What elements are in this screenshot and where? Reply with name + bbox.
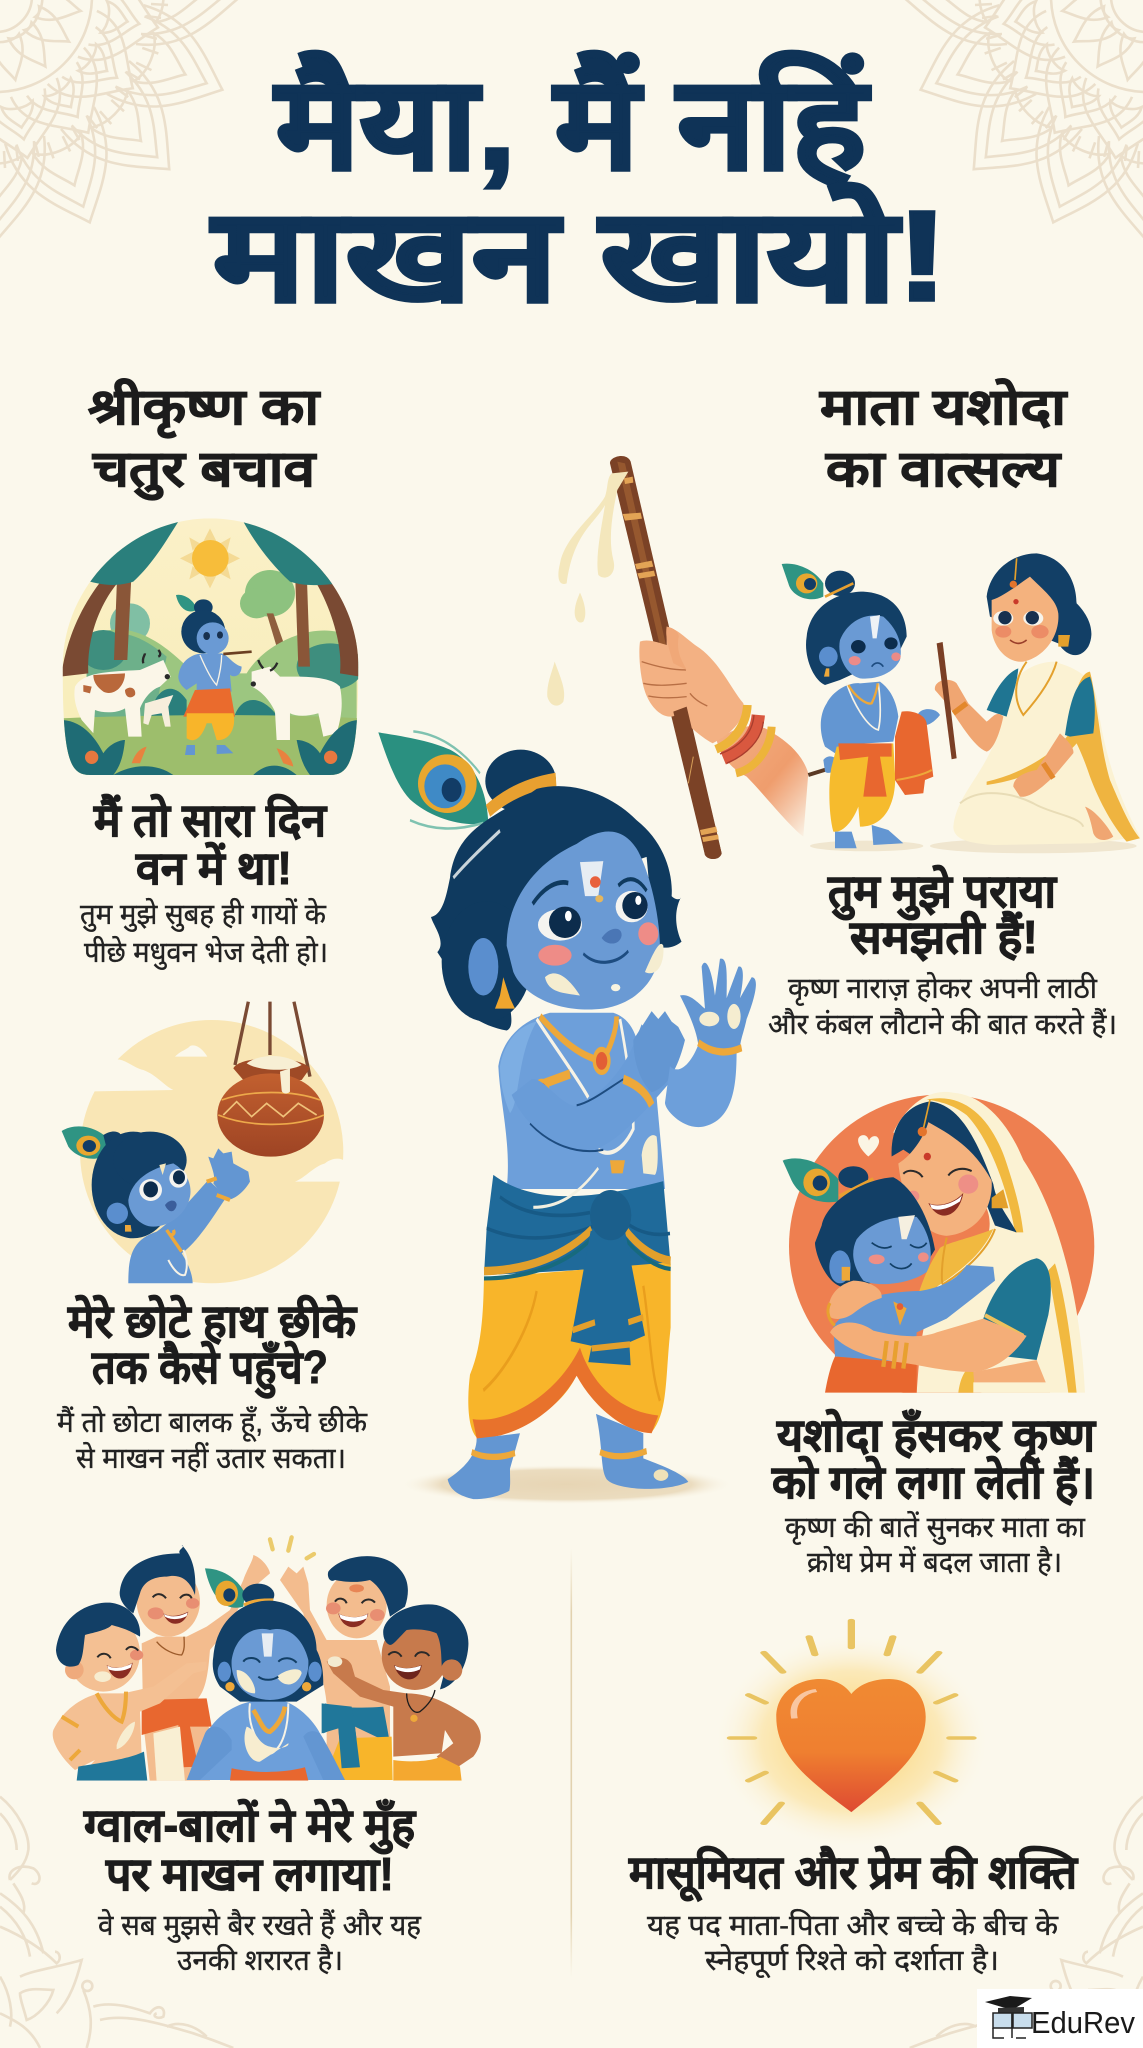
butter on belly bbox=[642, 1135, 658, 1175]
anklets bbox=[472, 1451, 647, 1457]
face bbox=[898, 1122, 992, 1236]
body text: यह पद माता-पिता और बच्चे के बीच के bbox=[647, 1909, 1059, 1942]
back left boy bbox=[120, 1545, 270, 1783]
panel: power of innocence and love bbox=[628, 1621, 1079, 1978]
body text: कृष्ण नाराज़ होकर अपनी लाठी bbox=[788, 972, 1097, 1006]
illustration: mother hugging child bbox=[783, 1092, 1094, 1398]
middle hand bbox=[633, 1011, 685, 1092]
yashoda hair bbox=[987, 553, 1091, 655]
heading: left column: श्रीकृष्ण का bbox=[88, 378, 321, 439]
knot bbox=[590, 1190, 631, 1240]
corner ornament bottom left bbox=[0, 1797, 233, 2048]
heading: ग्वाल-बालों ने मेरे मुँह bbox=[83, 1799, 417, 1855]
sparkle marks bbox=[270, 1537, 314, 1558]
forearm bbox=[918, 709, 940, 725]
legs and feet bbox=[448, 1414, 688, 1499]
icon: radiant heart bbox=[713, 1621, 990, 1850]
boy hands bbox=[208, 1148, 250, 1200]
corner ornament bottom right bbox=[910, 1797, 1143, 2048]
saree veil bbox=[893, 1092, 1085, 1393]
heading: तक कैसे पहुँचे? bbox=[91, 1341, 328, 1399]
logo: EduRev bbox=[977, 1989, 1143, 2048]
cheeks, mouth, butter bbox=[538, 922, 663, 995]
earring bbox=[495, 977, 515, 1009]
front left boy bbox=[52, 1602, 164, 1781]
dhoti bbox=[829, 743, 895, 832]
necklaces bbox=[527, 1016, 633, 1153]
mid trees and bushes bbox=[80, 570, 363, 720]
hair bbox=[431, 786, 682, 1031]
topknot bbox=[103, 1131, 122, 1148]
body text: तुम मुझे सुबह ही गायों के bbox=[80, 898, 327, 932]
body text: कृष्ण की बातें सुनकर माता का bbox=[785, 1511, 1085, 1545]
yashoda seated body bbox=[953, 662, 1140, 845]
left spotted cow bbox=[74, 650, 171, 737]
body text bbox=[647, 1909, 1059, 1978]
body text bbox=[98, 1909, 422, 1977]
blouse bbox=[983, 1258, 1051, 1360]
front right boy bbox=[327, 1604, 481, 1781]
body text bbox=[768, 972, 1117, 1041]
crossed arm bbox=[512, 1024, 675, 1151]
torso bbox=[821, 682, 898, 753]
ground bbox=[60, 715, 360, 777]
eyes and mouth bbox=[125, 1163, 187, 1232]
body text: और कंबल लौटाने की बात करते हैं। bbox=[768, 1008, 1117, 1041]
mother necklace bbox=[942, 1229, 995, 1284]
yashoda face bbox=[992, 577, 1058, 662]
illustration: reaching for the hanging pot bbox=[62, 1002, 347, 1283]
body text: वे सब मुझसे बैर रखते हैं और यह bbox=[98, 1909, 422, 1943]
floor shadows bbox=[810, 841, 923, 851]
corner mandala top right bbox=[902, 0, 1143, 241]
bangles bbox=[953, 703, 1053, 778]
bangles bbox=[883, 1341, 907, 1369]
krishna bbox=[783, 1158, 995, 1393]
title: मैया, मैं नहिं bbox=[274, 51, 870, 196]
tilak bbox=[580, 861, 603, 896]
stick in boy hand bbox=[808, 760, 857, 775]
panel: small hands and the pot bbox=[57, 1002, 368, 1475]
hair bbox=[92, 1132, 187, 1238]
illustration: central Krishna bbox=[378, 731, 756, 1504]
neck and torso bbox=[498, 1013, 665, 1189]
yashoda arms bbox=[935, 680, 1073, 797]
heading bbox=[83, 1799, 417, 1900]
ropes bbox=[235, 1002, 310, 1077]
illustration: sad krishna and seated yashoda bbox=[782, 553, 1140, 853]
face bbox=[128, 1163, 191, 1227]
heading: पर माखन लगाया! bbox=[105, 1848, 394, 1900]
back right boy bbox=[280, 1556, 408, 1780]
body text bbox=[785, 1511, 1085, 1579]
body text: पीछे मधुवन भेज देती हो। bbox=[84, 936, 328, 970]
stick bbox=[610, 456, 722, 859]
raised forearm bbox=[665, 1040, 737, 1127]
heading bbox=[827, 865, 1058, 963]
armlet and necklace bbox=[167, 1230, 182, 1252]
ear bbox=[468, 938, 498, 995]
illustration: hand with stick and dripping butter bbox=[547, 456, 808, 859]
sky bbox=[62, 518, 358, 720]
dhoti orange hem bbox=[473, 1347, 658, 1438]
centre krishna with butter on face bbox=[187, 1568, 345, 1781]
panel: yashoda embraces krishna bbox=[771, 1092, 1097, 1579]
heading: मैं तो सारा दिन bbox=[93, 794, 327, 846]
panel: friends smeared butter bbox=[53, 1537, 481, 1977]
feather bbox=[62, 1126, 112, 1159]
foreground leaves and flowers bbox=[60, 720, 360, 775]
heading: समझती हैं! bbox=[849, 911, 1038, 963]
eyes and brows bbox=[533, 879, 648, 941]
heading: तुम मुझे पराया bbox=[827, 865, 1058, 921]
body text: क्रोध प्रेम में बदल जाता है। bbox=[807, 1546, 1062, 1579]
hanging cloth bbox=[571, 1226, 645, 1365]
pale sun disc bbox=[80, 1020, 343, 1283]
heading bbox=[67, 1295, 358, 1399]
gold waist trim bbox=[484, 1229, 671, 1271]
tall trees bbox=[60, 521, 360, 677]
krishna arm and body bbox=[833, 1265, 995, 1363]
legs bbox=[835, 825, 903, 848]
pot bbox=[217, 1056, 324, 1157]
butter drips bbox=[547, 472, 628, 706]
corner mandala top left bbox=[0, 0, 241, 241]
heading: left column: चतुर बचाव bbox=[92, 441, 317, 501]
arm bbox=[717, 726, 808, 837]
heading: left column bbox=[88, 378, 321, 501]
illustration: laughing cowherd boys bbox=[53, 1537, 481, 1783]
waist bbox=[973, 1360, 1050, 1393]
stick over fingers bbox=[673, 707, 722, 859]
heading bbox=[771, 1409, 1097, 1508]
heading: को गले लगा लेती हैं। bbox=[771, 1456, 1095, 1508]
title: माखन खायो! bbox=[211, 183, 948, 328]
bangles bbox=[716, 705, 772, 773]
hair bbox=[892, 1101, 1017, 1232]
heading: वन में था! bbox=[135, 842, 292, 894]
title bbox=[211, 51, 948, 328]
heading: right column: माता यशोदा bbox=[819, 378, 1068, 435]
body text: स्नेहपूर्ण रिश्ते को दर्शाता है। bbox=[705, 1944, 999, 1978]
panel: you consider me a stranger bbox=[768, 553, 1140, 1041]
mother upper arm bbox=[830, 1319, 1027, 1372]
clouds bbox=[80, 1045, 347, 1182]
icon: graduation cap with glasses bbox=[985, 1996, 1032, 2038]
panel: forest alibi bbox=[60, 517, 363, 970]
body text bbox=[57, 1406, 368, 1475]
sun bbox=[180, 528, 240, 588]
logo: EduRev: EduRev bbox=[1031, 2005, 1135, 2040]
face bbox=[507, 832, 660, 1009]
boy body bbox=[128, 1180, 227, 1283]
heading: यशोदा हँसकर कृष्ण bbox=[776, 1409, 1097, 1465]
divider bbox=[570, 1548, 572, 1978]
heading: मेरे छोटे हाथ छीके bbox=[67, 1295, 358, 1347]
open palm bbox=[680, 959, 756, 1050]
heading: मासूमियत और प्रेम की शक्ति bbox=[628, 1846, 1079, 1902]
white heart bbox=[858, 1135, 879, 1157]
small krishna bbox=[782, 564, 940, 848]
orange disc bbox=[789, 1094, 1094, 1398]
stick held by yashoda bbox=[937, 642, 957, 759]
hand bbox=[639, 627, 744, 743]
heading: right column: का वात्सल्य bbox=[825, 441, 1062, 497]
calf bbox=[143, 695, 173, 727]
body text bbox=[80, 898, 328, 970]
orange blanket bbox=[895, 711, 933, 795]
peacock feather bbox=[378, 731, 488, 828]
body text: मैं तो छोटा बालक हूँ, ऊँचे छीके bbox=[57, 1406, 368, 1442]
ground shadow bbox=[400, 1465, 733, 1504]
dhoti bbox=[468, 1262, 671, 1437]
small krishna in forest bbox=[176, 595, 252, 755]
body text: से माखन नहीं उतार सकता। bbox=[76, 1442, 346, 1475]
illustration: forest with cows bbox=[60, 517, 363, 777]
topknot and gold band bbox=[485, 750, 556, 812]
heading: right column bbox=[819, 378, 1068, 497]
right white cow bbox=[252, 667, 342, 740]
blue sash bbox=[484, 1175, 671, 1275]
heading bbox=[93, 794, 327, 894]
body text: उनकी शरारत है। bbox=[177, 1944, 343, 1977]
